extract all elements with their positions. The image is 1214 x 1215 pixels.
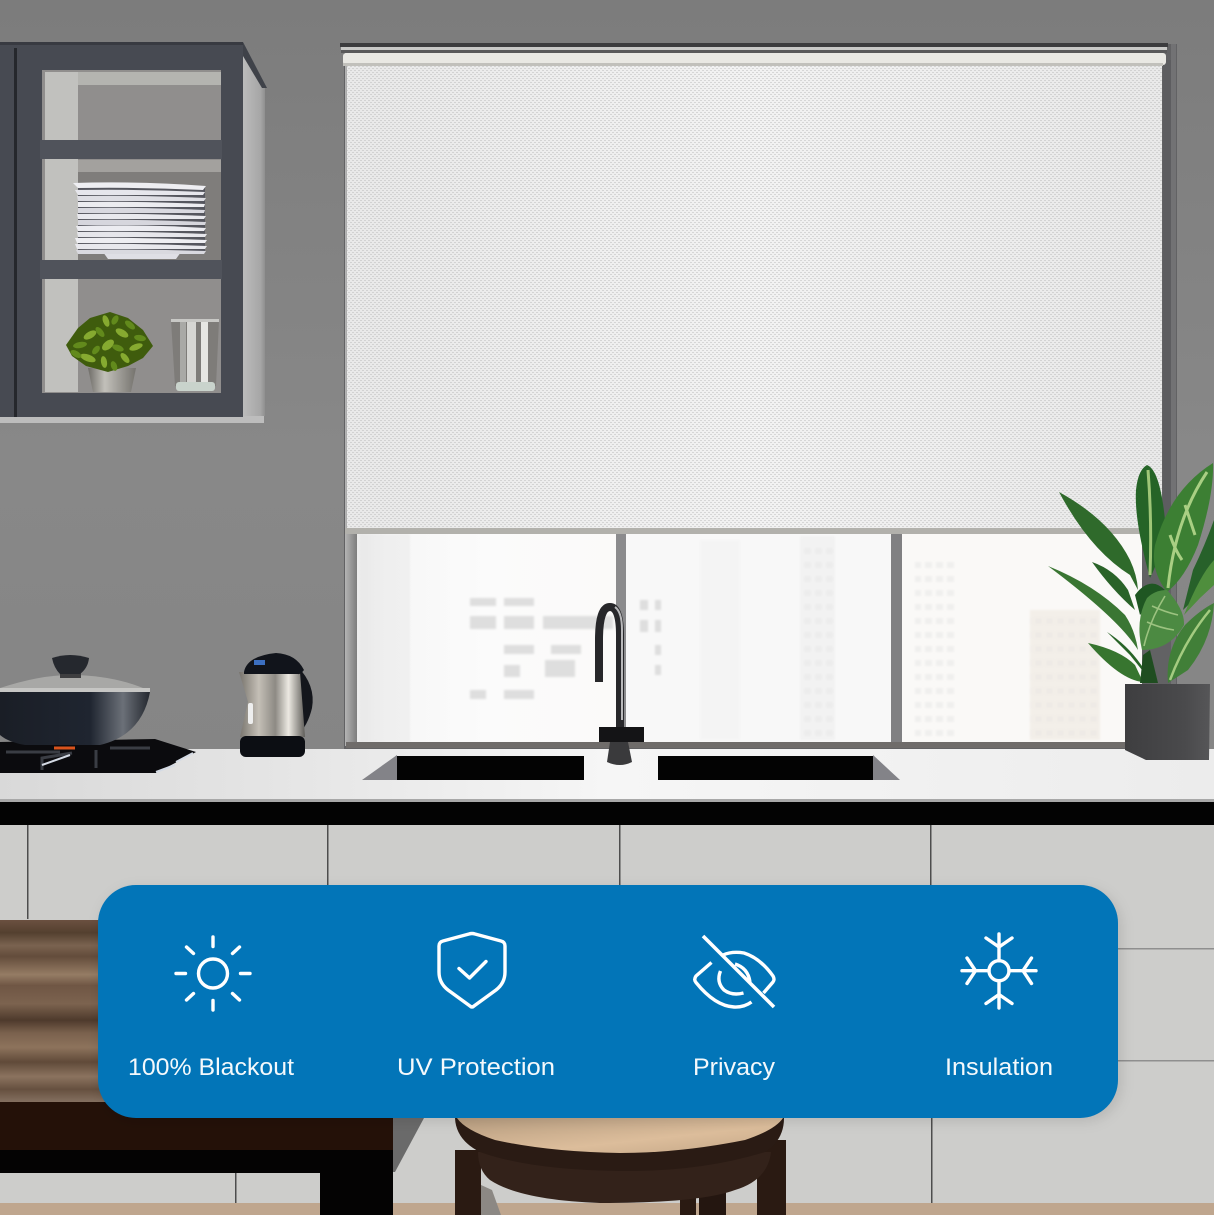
double sink <box>362 755 900 780</box>
plant pot <box>1125 684 1210 760</box>
kitchen counter <box>0 749 1214 825</box>
kettle <box>239 653 313 757</box>
blind fabric <box>347 66 1162 528</box>
wooden stool <box>455 1118 786 1215</box>
feature: Insulation <box>945 934 1053 1081</box>
feature: 100% Blackout <box>128 937 294 1081</box>
black rail <box>0 1150 393 1173</box>
faucet <box>599 607 644 765</box>
table leg <box>320 1172 393 1215</box>
light wood top <box>0 920 110 1102</box>
cooking pot <box>0 655 150 745</box>
cabinet interior <box>42 70 221 393</box>
label: Privacy: Privacy <box>693 1054 775 1081</box>
base cabinets <box>0 825 1214 1204</box>
window frame <box>344 44 1177 750</box>
dark wood band <box>0 1102 393 1151</box>
bottom rail <box>345 528 1163 534</box>
icon: shield with check <box>439 934 505 1007</box>
roller blind <box>340 43 1168 534</box>
icon: sun <box>176 937 250 1010</box>
feature: Privacy <box>693 936 775 1081</box>
feature panel <box>98 885 1118 1118</box>
drinking glass <box>171 319 219 391</box>
floor <box>0 1203 1214 1215</box>
label: UV Protection: UV Protection <box>397 1054 555 1081</box>
leaves <box>1048 463 1214 683</box>
icon: crossed-out eye <box>695 936 774 1007</box>
icon: snowflake <box>962 934 1036 1008</box>
stack of plates <box>73 182 207 259</box>
label: 100% Blackout: 100% Blackout <box>128 1054 294 1081</box>
window glass with blurred city view <box>357 534 1142 742</box>
headrail <box>340 43 1168 66</box>
potted plant <box>1048 463 1214 760</box>
potted shrub <box>66 312 153 392</box>
feature: UV Protection <box>397 934 555 1081</box>
wall cabinet <box>0 42 267 423</box>
stove <box>0 739 196 773</box>
label: Insulation: Insulation <box>945 1054 1053 1081</box>
panel shadow <box>100 888 1122 1122</box>
table side panel <box>393 1118 424 1172</box>
wall background <box>0 0 1214 760</box>
wooden table <box>0 920 424 1215</box>
